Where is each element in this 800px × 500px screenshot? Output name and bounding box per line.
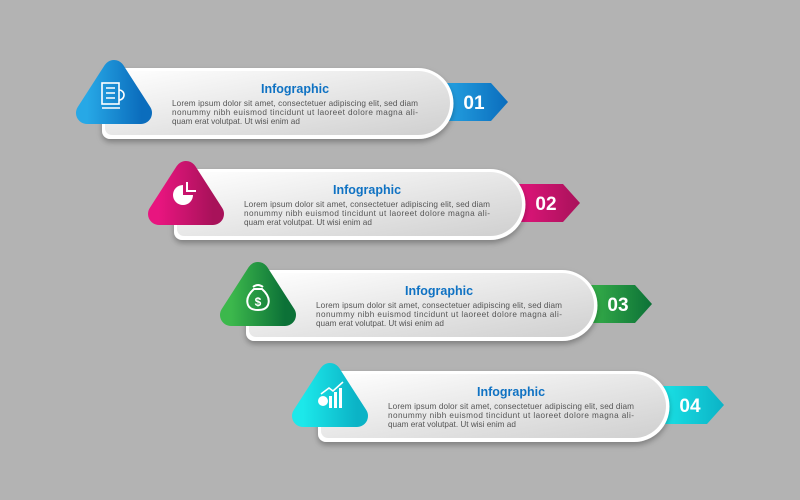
triangle icon 2: [159, 172, 213, 214]
triangle icon 3: $: [255, 295, 262, 309]
text 3: Lorem ipsum dolor sit amet, consectetuer adipiscing elit, sed diam: [316, 301, 562, 310]
tag 02: [509, 184, 580, 222]
tag 04: [653, 386, 724, 424]
tag 01: [437, 83, 508, 121]
text 2: Lorem ipsum dolor sit amet, consectetuer adipiscing elit, sed diam: [244, 200, 490, 209]
text 2: Infographic: [333, 183, 401, 197]
text 4: quam erat volutpat. Ut wisi enim ad: [388, 420, 516, 429]
text 3: [316, 284, 562, 328]
tag 02: 02: [535, 194, 557, 215]
triangle icon 3: [231, 273, 285, 315]
text 1: nonummy nibh euismod tincidunt ut laoreet dolore magna ali-: [172, 108, 418, 117]
tag 03: 03: [607, 295, 629, 316]
text 3: Infographic: [405, 284, 473, 298]
text 1: Lorem ipsum dolor sit amet, consectetuer adipiscing elit, sed diam: [172, 99, 418, 108]
triangle icon 1: [87, 71, 141, 113]
text 1: [172, 82, 418, 126]
card 1: [102, 68, 453, 139]
tag 04: 04: [679, 396, 701, 417]
text 1: Infographic: [261, 82, 329, 96]
row 3: [231, 270, 652, 341]
text 1: quam erat volutpat. Ut wisi enim ad: [172, 117, 300, 126]
text 2: [244, 183, 490, 227]
text 4: nonummy nibh euismod tincidunt ut laoreet dolore magna ali-: [388, 411, 634, 420]
text 2: nonummy nibh euismod tincidunt ut laoreet dolore magna ali-: [244, 209, 490, 218]
card 4: [318, 371, 669, 442]
text 4: [388, 385, 634, 429]
card 3: [246, 270, 597, 341]
text 3: quam erat volutpat. Ut wisi enim ad: [316, 319, 444, 328]
tag 03: [581, 285, 652, 323]
triangle icon 4: [303, 374, 357, 416]
row 4: [303, 371, 724, 442]
card 2: [174, 169, 525, 240]
tag 01: 01: [463, 93, 485, 114]
row 2: [159, 169, 580, 240]
row 1: [87, 68, 508, 139]
text 4: Infographic: [477, 385, 545, 399]
text 4: Lorem ipsum dolor sit amet, consectetuer adipiscing elit, sed diam: [388, 402, 634, 411]
text 2: quam erat volutpat. Ut wisi enim ad: [244, 218, 372, 227]
text 3: nonummy nibh euismod tincidunt ut laoreet dolore magna ali-: [316, 310, 562, 319]
